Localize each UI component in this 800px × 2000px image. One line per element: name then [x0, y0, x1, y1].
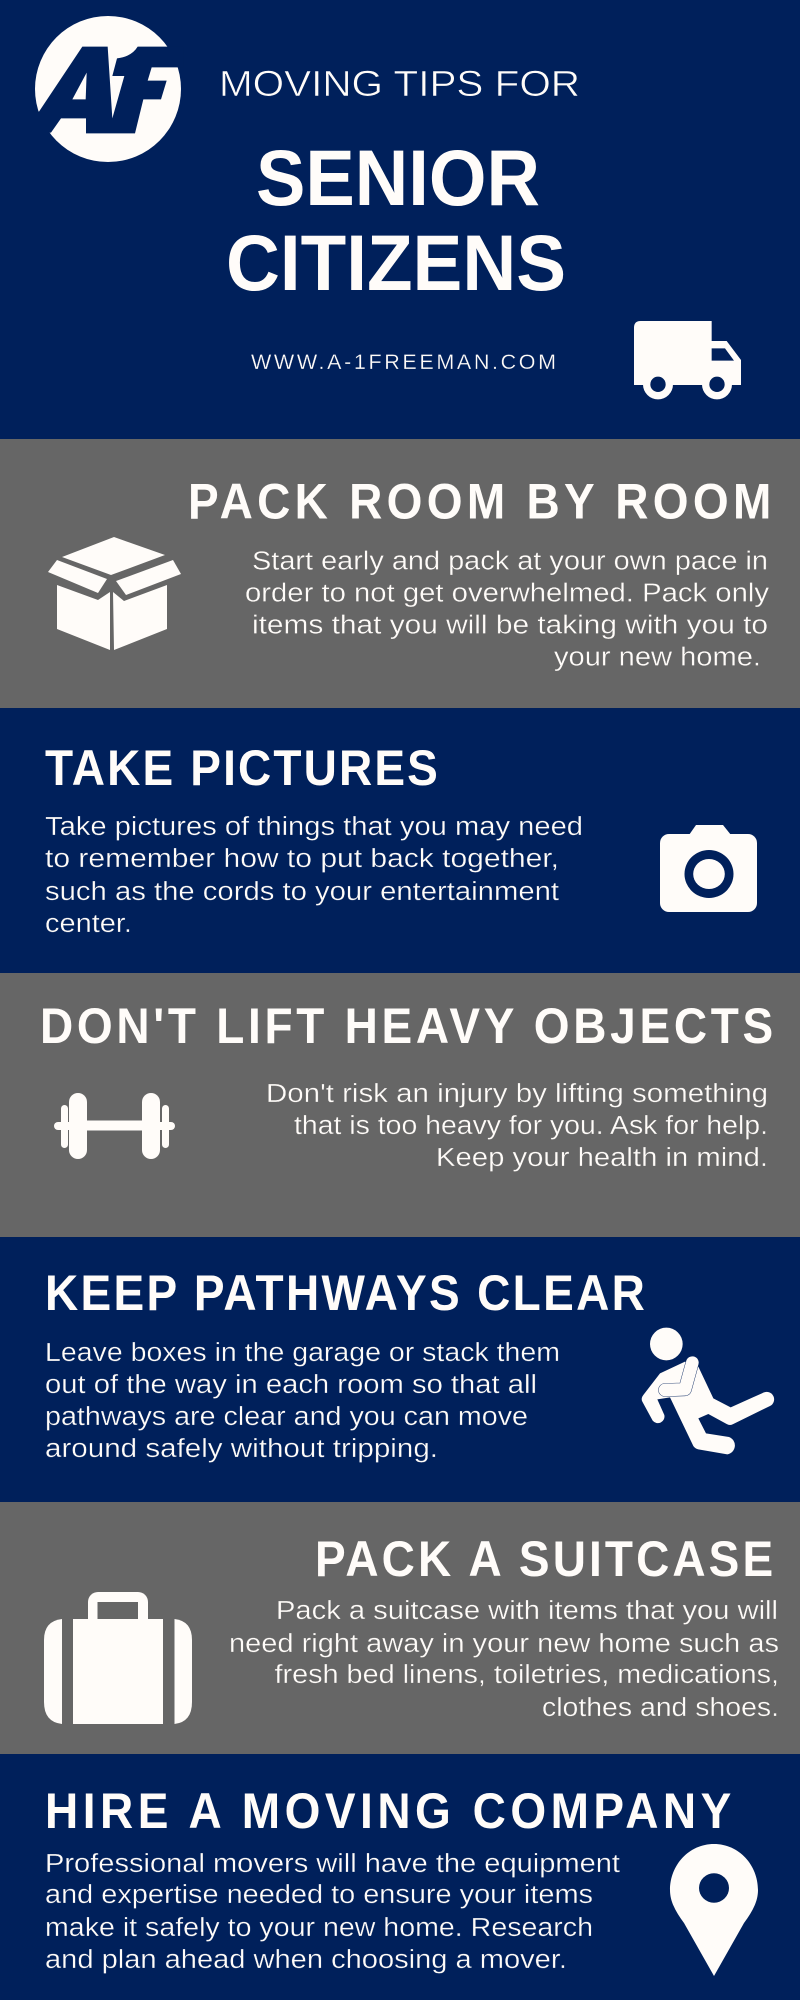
- text: pack a suitcase body: fresh bed linens, toiletries, medications,: [274, 1661, 779, 1689]
- text: don't lift body: [266, 1080, 768, 1172]
- text: keep pathways body: Leave boxes in the garage or stack them: [45, 1339, 560, 1367]
- text: hire a moving company body: [45, 1850, 620, 1974]
- text: pack room by room body: items that you will be taking with you to: [252, 612, 768, 640]
- text: pack room by room body: Start early and pack at your own pace in: [252, 548, 768, 576]
- text: pack a suitcase body: [229, 1597, 779, 1722]
- title: senior citizens: SENIOR: [256, 133, 540, 222]
- text: hire a moving company body: Professional movers will have the equipment: [45, 1850, 620, 1878]
- text: pack a suitcase body: clothes and shoes.: [542, 1694, 779, 1722]
- heading: keep pathways clear: KEEP PATHWAYS CLEAR: [45, 1266, 645, 1321]
- icon: suitcase: [44, 1592, 192, 1724]
- text: keep pathways body: [45, 1339, 560, 1463]
- icon: box: [48, 537, 181, 650]
- heading: don't lift heavy objects: DON'T LIFT HEAVY OBJECTS: [40, 999, 773, 1054]
- icon: A1F logo: [32, 16, 183, 162]
- text: take pictures body: Take pictures of things that you may need: [45, 813, 583, 841]
- text: pack a suitcase body: need right away in your new home such as: [229, 1630, 779, 1658]
- heading: hire a moving company: HIRE A MOVING COMPANY: [45, 1784, 731, 1839]
- text: don't lift body: that is too heavy for you. Ask for help.: [294, 1112, 768, 1140]
- text: hire a moving company body: and expertise needed to ensure your items: [45, 1881, 593, 1909]
- text: pack a suitcase body: Pack a suitcase with items that you will: [276, 1597, 778, 1625]
- text: hire a moving company body: and plan ahead when choosing a mover.: [45, 1946, 567, 1974]
- panel: hire a moving company: [0, 1754, 800, 2000]
- panel: don't lift heavy objects: [0, 973, 800, 1237]
- text: take pictures body: such as the cords to your entertainment: [45, 878, 559, 906]
- text: take pictures body: to remember how to put back together,: [45, 845, 559, 873]
- text: pack room by room body: your new home.: [554, 644, 761, 672]
- text: keep pathways body: around safely without tripping.: [45, 1435, 438, 1463]
- text: pack room by room body: order to not get overwhelmed. Pack only: [245, 580, 769, 608]
- text: don't lift body: Keep your health in mind.: [436, 1144, 768, 1172]
- text: hire a moving company body: make it safely to your new home. Research: [45, 1914, 593, 1942]
- panel: pack a suitcase: [0, 1502, 800, 1754]
- website url: WWW.A-1FREEMAN.COM: [251, 350, 556, 374]
- title: senior citizens: CITIZENS: [226, 218, 566, 307]
- heading: pack room by room: PACK ROOM BY ROOM: [188, 475, 771, 530]
- subtitle: moving tips for: MOVING TIPS FOR: [219, 63, 580, 104]
- icon: truck: [634, 321, 741, 399]
- icon: location pin: [670, 1844, 758, 1976]
- panel: take pictures: [0, 708, 800, 973]
- text: take pictures body: [45, 813, 583, 938]
- text: take pictures body: center.: [45, 910, 132, 938]
- heading: pack a suitcase: PACK A SUITCASE: [315, 1532, 773, 1587]
- text: keep pathways body: pathways are clear and you can move: [45, 1403, 528, 1431]
- icon: camera: [660, 825, 757, 912]
- icon: dumbbell: [54, 1093, 175, 1159]
- text: pack room by room body: [245, 548, 769, 672]
- panel: keep pathways clear: [0, 1237, 800, 1502]
- title: senior citizens: [226, 133, 566, 307]
- icon: tripping person: [642, 1328, 774, 1454]
- panel: header: [0, 0, 800, 439]
- text: don't lift body: Don't risk an injury by lifting something: [266, 1080, 768, 1108]
- heading: take pictures: TAKE PICTURES: [45, 741, 438, 796]
- panel: pack room by room: [0, 439, 800, 708]
- text: keep pathways body: out of the way in each room so that all: [45, 1371, 537, 1399]
